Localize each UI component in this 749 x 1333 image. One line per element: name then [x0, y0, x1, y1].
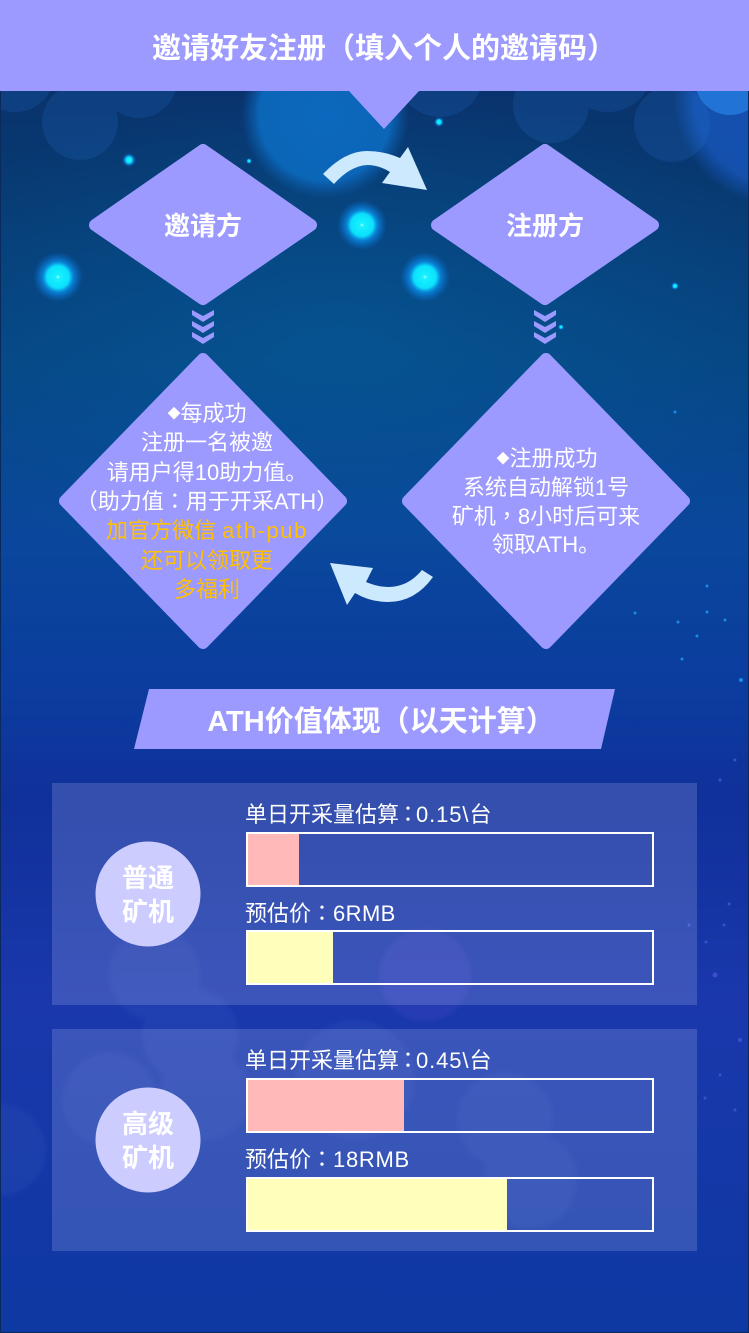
label: daily output: 单日开采量估算： — [245, 1048, 419, 1073]
reward text: 注册一名被邀 — [141, 430, 273, 455]
panel: standard miner — [52, 783, 697, 1005]
reward text: 还可以领取更 — [141, 548, 273, 573]
label: daily output: 单日开采量估算： — [245, 802, 419, 827]
label: daily output: 0.15\ — [416, 802, 469, 827]
badge: standard miner — [96, 842, 200, 946]
panel: inviter diamond — [95, 150, 311, 299]
badge: advanced miner: 高级 — [122, 1109, 174, 1139]
section heading banner — [134, 689, 615, 749]
reward text — [452, 446, 640, 557]
label: daily output: 台 — [469, 1048, 491, 1073]
reward text: 每成功 — [180, 401, 247, 426]
arrow: inviter to registrant — [323, 147, 427, 190]
label: daily output: 0.45\ — [416, 1048, 469, 1073]
panel: registrant diamond — [437, 150, 653, 299]
reward text: 加官方微信 ath-pub — [106, 518, 308, 543]
reward text: 多福利 — [174, 577, 240, 602]
panel: registrant reward diamond — [408, 359, 684, 643]
label: daily output: 台 — [469, 802, 491, 827]
reward text: 请用户得10助力值。 — [107, 460, 307, 485]
label: estimated price: 预估价：6RMB — [245, 901, 396, 926]
reward text: （助力值：用于开采ATH） — [76, 489, 338, 514]
bar: daily output — [247, 1079, 653, 1132]
reward text: 注册成功 — [510, 446, 598, 471]
label: inviter: 邀请方 — [164, 211, 242, 241]
reward text — [76, 401, 338, 602]
reward text: 系统自动解锁1号 — [463, 475, 629, 500]
badge: advanced miner — [96, 1088, 200, 1192]
panel: inviter reward diamond — [65, 359, 341, 643]
bar: estimated price — [247, 1178, 653, 1231]
badge: standard miner: 普通 — [122, 863, 174, 893]
arrow: registrant to inviter — [330, 563, 433, 605]
reward text: 矿机，8小时后可来 — [452, 504, 640, 529]
reward text: 领取ATH。 — [492, 532, 600, 557]
reward text: ◆ — [167, 406, 180, 421]
reward text: ◆ — [496, 451, 510, 466]
bar: daily output — [247, 833, 653, 886]
bar: estimated price — [247, 931, 653, 984]
heading text: ATH价值体现（以天计算） — [207, 705, 555, 738]
arrow: chevrons right — [534, 310, 556, 344]
badge: advanced miner: 矿机 — [122, 1143, 174, 1173]
panel: advanced miner — [52, 1029, 697, 1251]
label: registrant: 注册方 — [506, 211, 584, 241]
title: 邀请好友注册（填入个人的邀请码） — [152, 32, 616, 65]
arrow: chevrons left — [192, 310, 214, 344]
label: estimated price: 预估价：18RMB — [245, 1147, 410, 1172]
header banner — [0, 0, 749, 129]
badge: standard miner: 矿机 — [122, 897, 174, 927]
